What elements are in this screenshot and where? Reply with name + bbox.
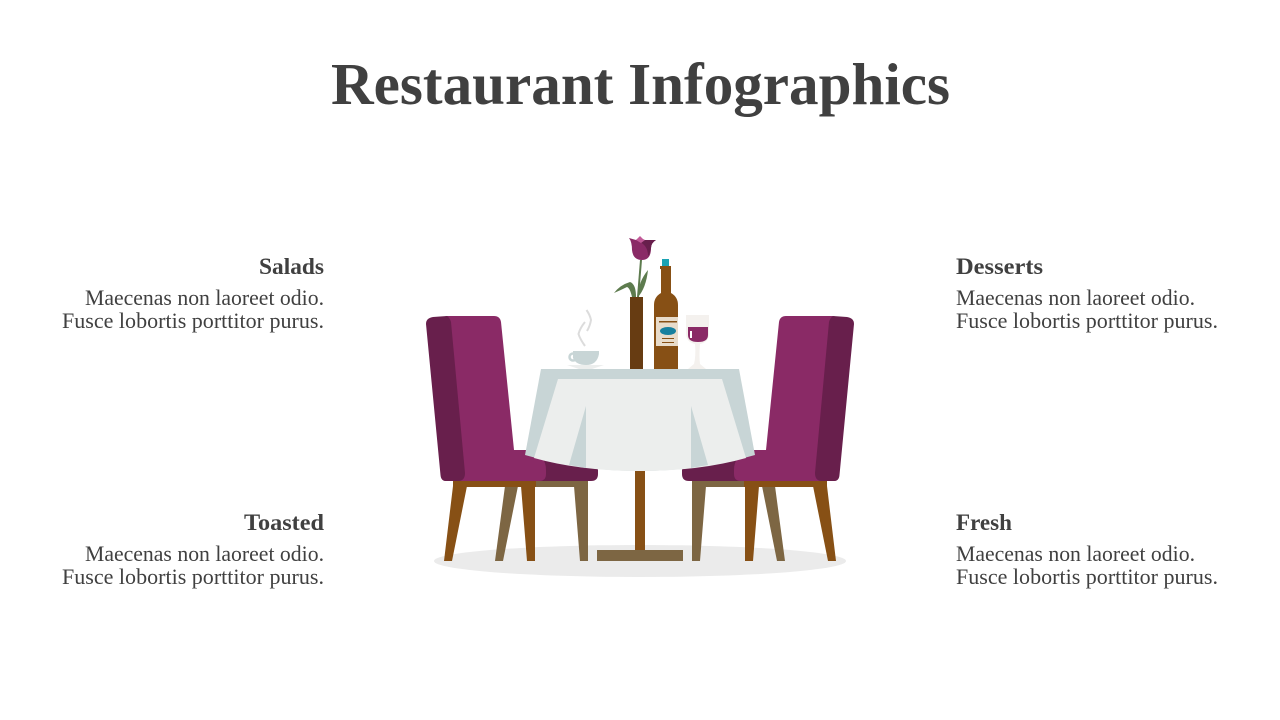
text block: Salads [62,254,324,333]
text block: Salads: Fusce lobortis porttitor purus. [62,308,324,333]
text block: Fresh: Fresh [956,510,1012,535]
right chair [682,316,854,561]
coffee cup with steam [567,310,604,369]
wine glass [686,315,709,369]
text block: Fresh: Fusce lobortis porttitor purus. [956,564,1218,589]
illustration: restaurant table scene [426,236,854,577]
floor shadow [434,545,846,577]
table base [597,465,683,561]
title: Restaurant Infographics [331,51,950,117]
text block: Toasted: Fusce lobortis porttitor purus. [62,564,324,589]
text block: Fresh: Maecenas non laoreet odio. [956,541,1195,566]
text block: Desserts [956,254,1218,333]
text block: Toasted: Toasted [244,510,324,535]
text block: Toasted: Maecenas non laoreet odio. [85,541,324,566]
text block: Toasted [62,510,324,589]
tablecloth [525,369,755,471]
text block: Desserts: Maecenas non laoreet odio. [956,285,1195,310]
wine bottle [654,259,678,369]
text block: Salads: Salads [259,254,324,279]
text block: Salads: Maecenas non laoreet odio. [85,285,324,310]
text block: Desserts: Desserts [956,254,1043,279]
text block: Desserts: Fusce lobortis porttitor purus. [956,308,1218,333]
text block: Fresh [956,510,1218,589]
flower in vase [614,236,656,369]
left chair [426,316,598,561]
